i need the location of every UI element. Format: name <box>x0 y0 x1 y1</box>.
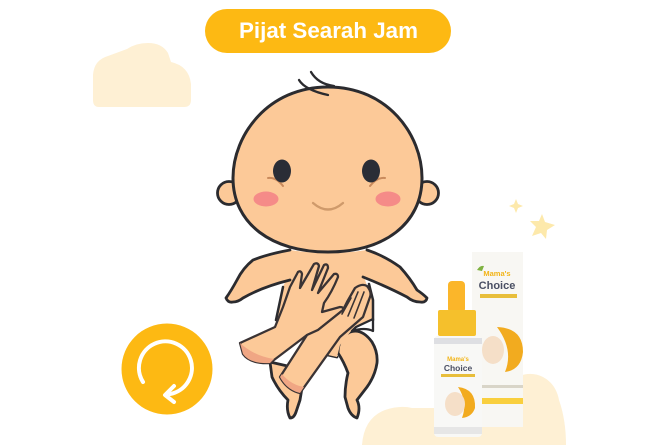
product: bottle <box>434 281 482 437</box>
title pill: Pijat Searah Jam <box>239 18 418 43</box>
baby: hair <box>299 72 334 95</box>
baby: right arm <box>345 250 427 302</box>
baby: smile <box>313 203 343 210</box>
baby illustration <box>218 72 438 418</box>
product: carton <box>472 252 523 427</box>
title pill <box>205 9 451 53</box>
massaging hands <box>240 263 371 393</box>
baby: cheeks <box>254 192 400 206</box>
icon: clockwise rotation badge <box>122 324 212 414</box>
baby: left arm <box>226 250 310 302</box>
product: bottle: Mama's <box>447 357 470 363</box>
product: carton: Mama's <box>483 269 511 278</box>
cloud: top left <box>93 43 191 107</box>
cloud: bottom right <box>362 374 566 445</box>
baby: eye shadows <box>268 178 385 186</box>
product: bottle: Choice <box>444 363 472 373</box>
hand: right forearm and fingers <box>280 285 371 393</box>
baby: head <box>233 87 422 252</box>
hand: left forearm and fingers <box>240 263 343 363</box>
decorative stars <box>509 199 555 239</box>
baby: legs <box>270 331 377 418</box>
baby: ears <box>218 182 438 204</box>
product: box and dropper bottle <box>434 252 523 437</box>
product: carton: Choice <box>479 280 515 292</box>
baby: eyes <box>273 160 380 182</box>
baby: torso and diaper <box>276 250 373 357</box>
